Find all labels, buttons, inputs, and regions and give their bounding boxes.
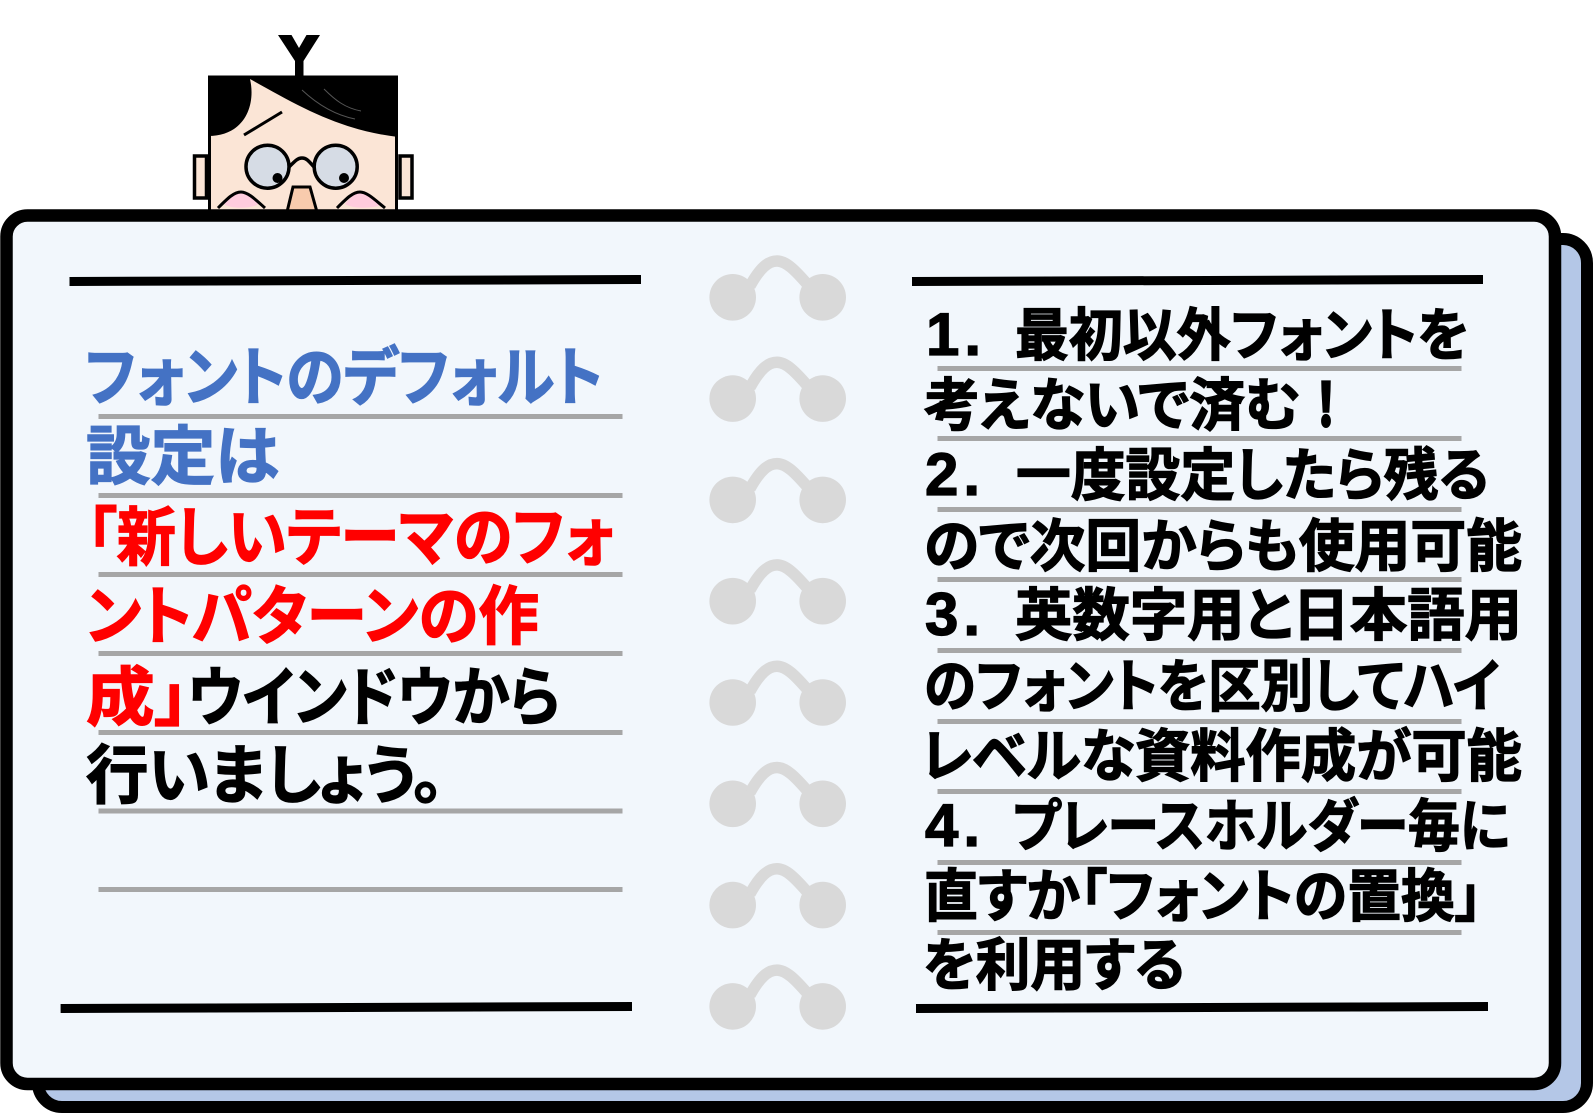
left cheek arc	[218, 192, 265, 208]
blue heading line 2: 設定は	[86, 421, 279, 493]
bottom rule right	[916, 1006, 1488, 1008]
item 3 line 1: 3.	[925, 581, 980, 648]
item 4 line 3: を利用する	[923, 934, 1185, 998]
nose	[287, 187, 317, 212]
ring 2	[709, 362, 846, 422]
left ear	[194, 156, 206, 198]
mixed line: red end of phrase and black text: 成」	[86, 662, 189, 734]
item 1 line 2: ！	[1316, 374, 1336, 438]
ring 4	[709, 565, 846, 624]
item 4 line 2: 直すか「フォントの置換」	[924, 865, 1482, 929]
eyebrow	[244, 112, 282, 135]
bottom rule left	[61, 1006, 632, 1008]
right page ruled lines	[938, 366, 1462, 935]
item 3 line 3: レベルな資料作成が可能	[921, 725, 1522, 789]
antenna	[278, 35, 320, 76]
item 4 line 1: 4.	[925, 792, 980, 859]
character peeking over notebook	[194, 35, 412, 212]
item 4 line 1: プレースホルダー毎に	[1012, 795, 1510, 859]
front page of notebook	[6, 216, 1555, 1084]
notebook binding rings	[709, 261, 846, 1030]
item 2 line 1: 2.	[925, 441, 980, 508]
item 1 line 1: 1.	[926, 301, 981, 368]
mixed line: red end of phrase and black text: ウインドウから	[188, 662, 560, 734]
red emphasis line 1: 「新しいテーマのフォ	[87, 502, 614, 574]
item 3 line 2: のフォントを区別してハイ	[924, 655, 1500, 719]
item 2 line 2: ので次回からも使用可能	[924, 515, 1522, 579]
right page numbered list	[921, 301, 1522, 998]
face	[210, 77, 396, 212]
right cheek arc	[337, 192, 385, 208]
ring 3	[709, 464, 846, 523]
left page ruled lines	[98, 414, 622, 892]
item 1 line 2: 考えないで済む	[924, 374, 1301, 438]
blue heading line 1: フォントのデフォルト	[85, 342, 603, 414]
hair	[208, 76, 398, 137]
ring 8	[709, 970, 846, 1030]
ring 5	[709, 666, 846, 726]
item 3 line 1: 英数字用と日本語用	[1015, 584, 1522, 648]
ring 1	[709, 261, 846, 321]
item 2 line 1: 一度設定したら残る	[1016, 444, 1489, 508]
left page text	[85, 342, 614, 812]
left cheek	[224, 193, 258, 208]
glasses	[246, 145, 357, 188]
back page of notebook	[38, 239, 1587, 1107]
ring 7	[709, 869, 846, 928]
red emphasis line 2: ントパターンの作	[86, 581, 539, 653]
item 1 line 1: 最初以外フォントを	[1015, 304, 1469, 368]
ring 6	[709, 768, 846, 827]
closing black line: 行いましょう。	[86, 740, 444, 812]
hair highlights	[302, 89, 361, 119]
right cheek	[345, 193, 383, 208]
top rule left	[70, 280, 641, 282]
right ear	[400, 156, 412, 198]
top rule right	[912, 280, 1483, 282]
